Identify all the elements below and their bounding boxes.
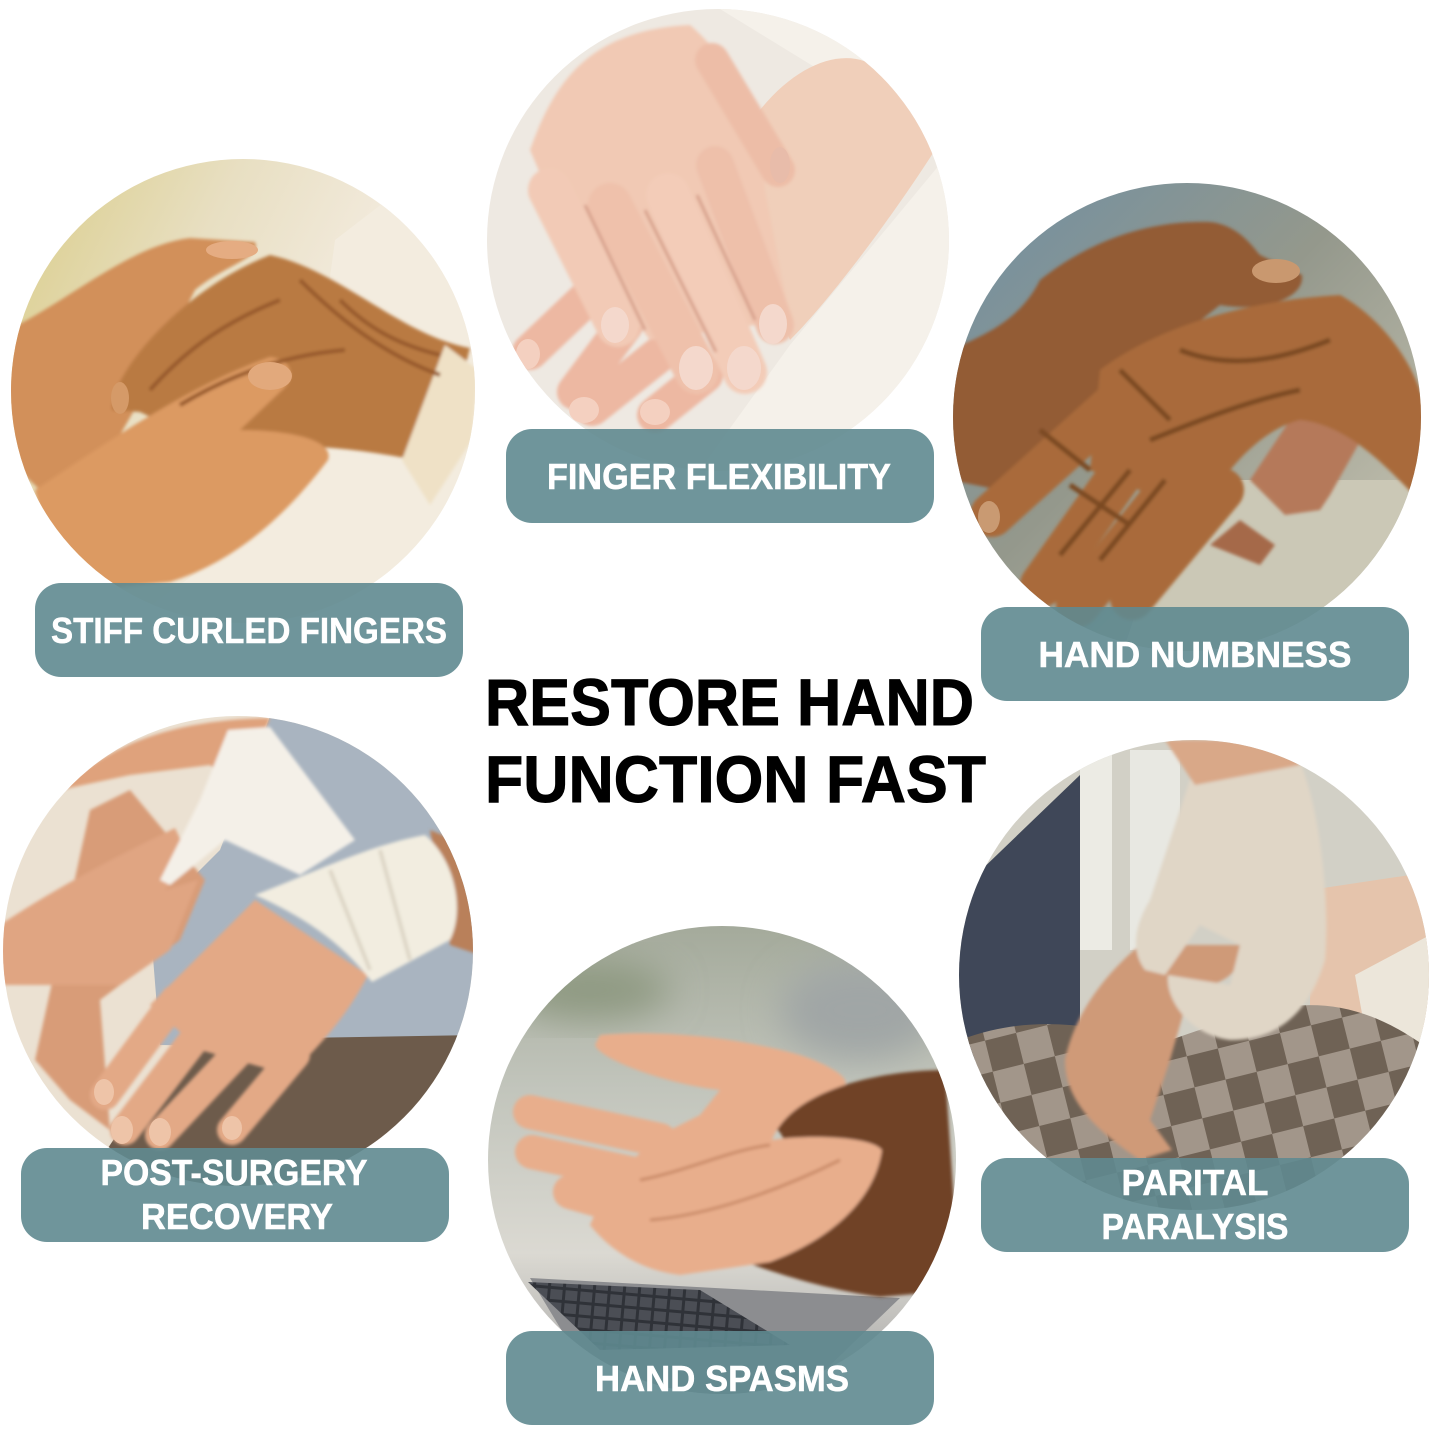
label: partial paralysis: PARITAL xyxy=(1122,1162,1268,1203)
label: hand numbness xyxy=(981,607,1409,701)
photo: aged hand held by another hand xyxy=(950,183,1430,660)
label: hand spasms: HAND SPASMS xyxy=(595,1358,849,1399)
photo: open hand above a laptop xyxy=(488,926,960,1394)
photo: wrist being bandaged xyxy=(0,716,480,1190)
title: RESTORE HAND xyxy=(485,665,974,739)
label: finger flexibility xyxy=(506,429,934,523)
panel: hand numbness xyxy=(950,183,1430,701)
label: stiff curled fingers: STIFF CURLED FINGERS xyxy=(51,610,447,651)
panel: partial paralysis xyxy=(950,740,1430,1252)
label: partial paralysis xyxy=(981,1158,1409,1252)
photo: hands holding an elderly hand xyxy=(8,159,480,623)
title: FUNCTION FAST xyxy=(485,742,986,816)
label: post-surgery recovery: RECOVERY xyxy=(141,1196,333,1237)
title xyxy=(485,665,986,816)
panel: hand spasms xyxy=(488,926,960,1425)
label: hand numbness: HAND NUMBNESS xyxy=(1038,634,1352,675)
panel: finger flexibility xyxy=(487,9,960,523)
label: post-surgery recovery xyxy=(21,1148,449,1242)
panel: post-surgery recovery xyxy=(0,716,480,1242)
photo: hands resting on towel xyxy=(487,9,949,430)
label: partial paralysis: PARALYSIS xyxy=(1102,1206,1288,1247)
label: finger flexibility: FINGER FLEXIBILITY xyxy=(547,456,891,497)
photo: gloved hand stretching a finger xyxy=(950,740,1430,1220)
label: hand spasms xyxy=(506,1331,934,1425)
panel: stiff curled fingers xyxy=(8,159,480,677)
label: stiff curled fingers xyxy=(35,583,463,677)
label: post-surgery recovery: POST-SURGERY xyxy=(100,1152,368,1193)
